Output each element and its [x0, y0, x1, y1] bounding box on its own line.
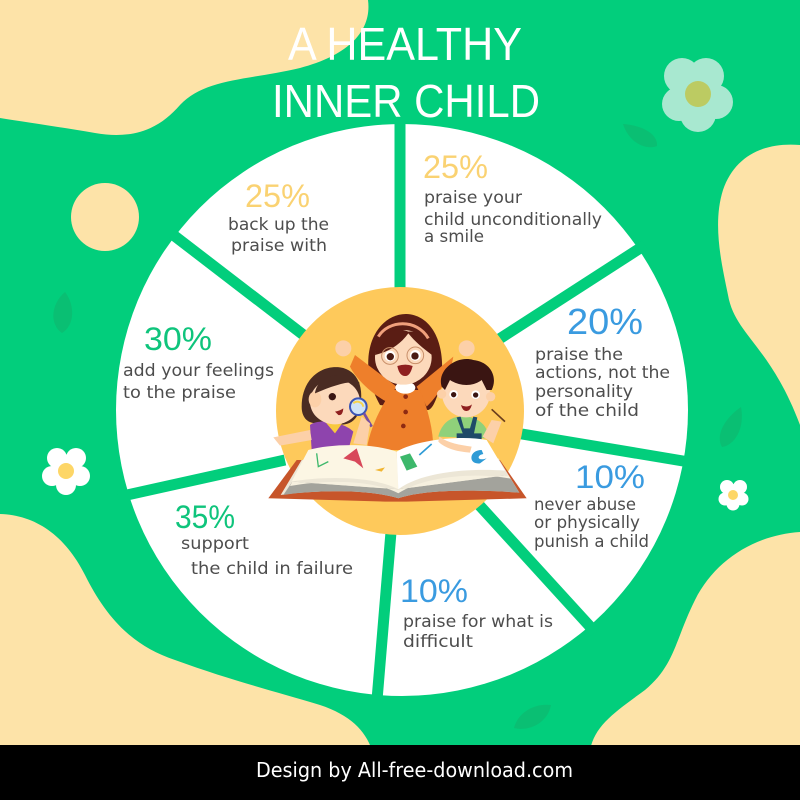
- center yellow circle: [276, 287, 524, 535]
- segment: 35%: 35%: [175, 499, 235, 535]
- letters on book: [317, 444, 487, 472]
- title: A HEALTHY: [288, 18, 522, 70]
- segment: 10% abuse: or physically: [534, 513, 640, 533]
- segment: 30%: to the praise: [123, 383, 236, 403]
- icon: white flower left: [42, 448, 90, 495]
- segment: 10% difficult: [400, 573, 553, 652]
- teacher hair: [368, 314, 442, 410]
- segment: 25% praise: [423, 149, 602, 247]
- book cover: [268, 460, 527, 502]
- segment: 20%: 20%: [567, 301, 643, 342]
- cream blob: bottom right: [590, 532, 800, 750]
- boy arm on book: [438, 437, 472, 453]
- segment: 10% abuse: never abuse: [534, 495, 636, 515]
- boy: [438, 416, 488, 438]
- girl: [302, 367, 361, 425]
- segment: 25% backup: [228, 178, 329, 256]
- segment: 20%: [535, 301, 670, 421]
- segment: 10% abuse: punish a child: [534, 532, 649, 552]
- segment: 25% backup: 25%: [245, 178, 310, 214]
- teacher dress: [367, 390, 433, 450]
- book page block: [281, 458, 519, 498]
- leaves: [53, 124, 742, 729]
- segment: 20%: of the child: [535, 401, 639, 421]
- segment: 25% praise: praise your: [424, 188, 522, 208]
- segment: 25% backup: back up the: [228, 215, 329, 235]
- icon: mint flower: [662, 58, 733, 132]
- segment: 30%: 30%: [144, 321, 212, 357]
- segment: 20%: personality: [535, 382, 633, 402]
- title: INNER CHILD: [272, 75, 540, 127]
- segment: 20%: actions, not the: [535, 363, 670, 383]
- teacher collar: [395, 382, 415, 394]
- segment: 35%: [175, 499, 353, 579]
- cream blob: bottom left: [0, 514, 372, 750]
- segment: 25% praise: a smile: [424, 227, 484, 247]
- cream circle: [71, 183, 139, 251]
- segment: 30%: add your feelings: [123, 361, 274, 381]
- segment: 25% praise: 25%: [423, 149, 488, 185]
- cream blob: top left: [0, 0, 368, 135]
- book page edges: [283, 475, 519, 498]
- teacher face: [375, 330, 432, 385]
- segment: 10% difficult: difficult: [403, 632, 473, 652]
- footer text: Design by All-free-download.com: [256, 758, 573, 782]
- segment: 20%: praise the: [535, 345, 623, 365]
- icon: white flower right: [718, 480, 748, 510]
- footer bar: [0, 745, 800, 800]
- segment: 10% difficult: 10%: [400, 573, 468, 609]
- illustration: children with book: [268, 314, 527, 502]
- book left page: [292, 445, 398, 489]
- segment dividers: [118, 120, 695, 700]
- segment: 30%: [123, 321, 274, 403]
- title: [272, 18, 540, 127]
- pie panel: [116, 124, 688, 696]
- segment: 35%: the child in failure: [191, 559, 353, 579]
- book right page: [397, 438, 505, 489]
- segment: 10% difficult: praise for what is: [403, 612, 553, 632]
- segment: 10% abuse: [534, 459, 649, 552]
- segment: 10% abuse: 10%: [575, 459, 645, 495]
- cream blob: right: [718, 145, 800, 425]
- segment: 35%: support: [181, 534, 249, 554]
- segment: 25% praise: child unconditionally: [424, 210, 602, 230]
- segment: 25% backup: praise with: [231, 236, 327, 256]
- teacher arms: [350, 355, 397, 402]
